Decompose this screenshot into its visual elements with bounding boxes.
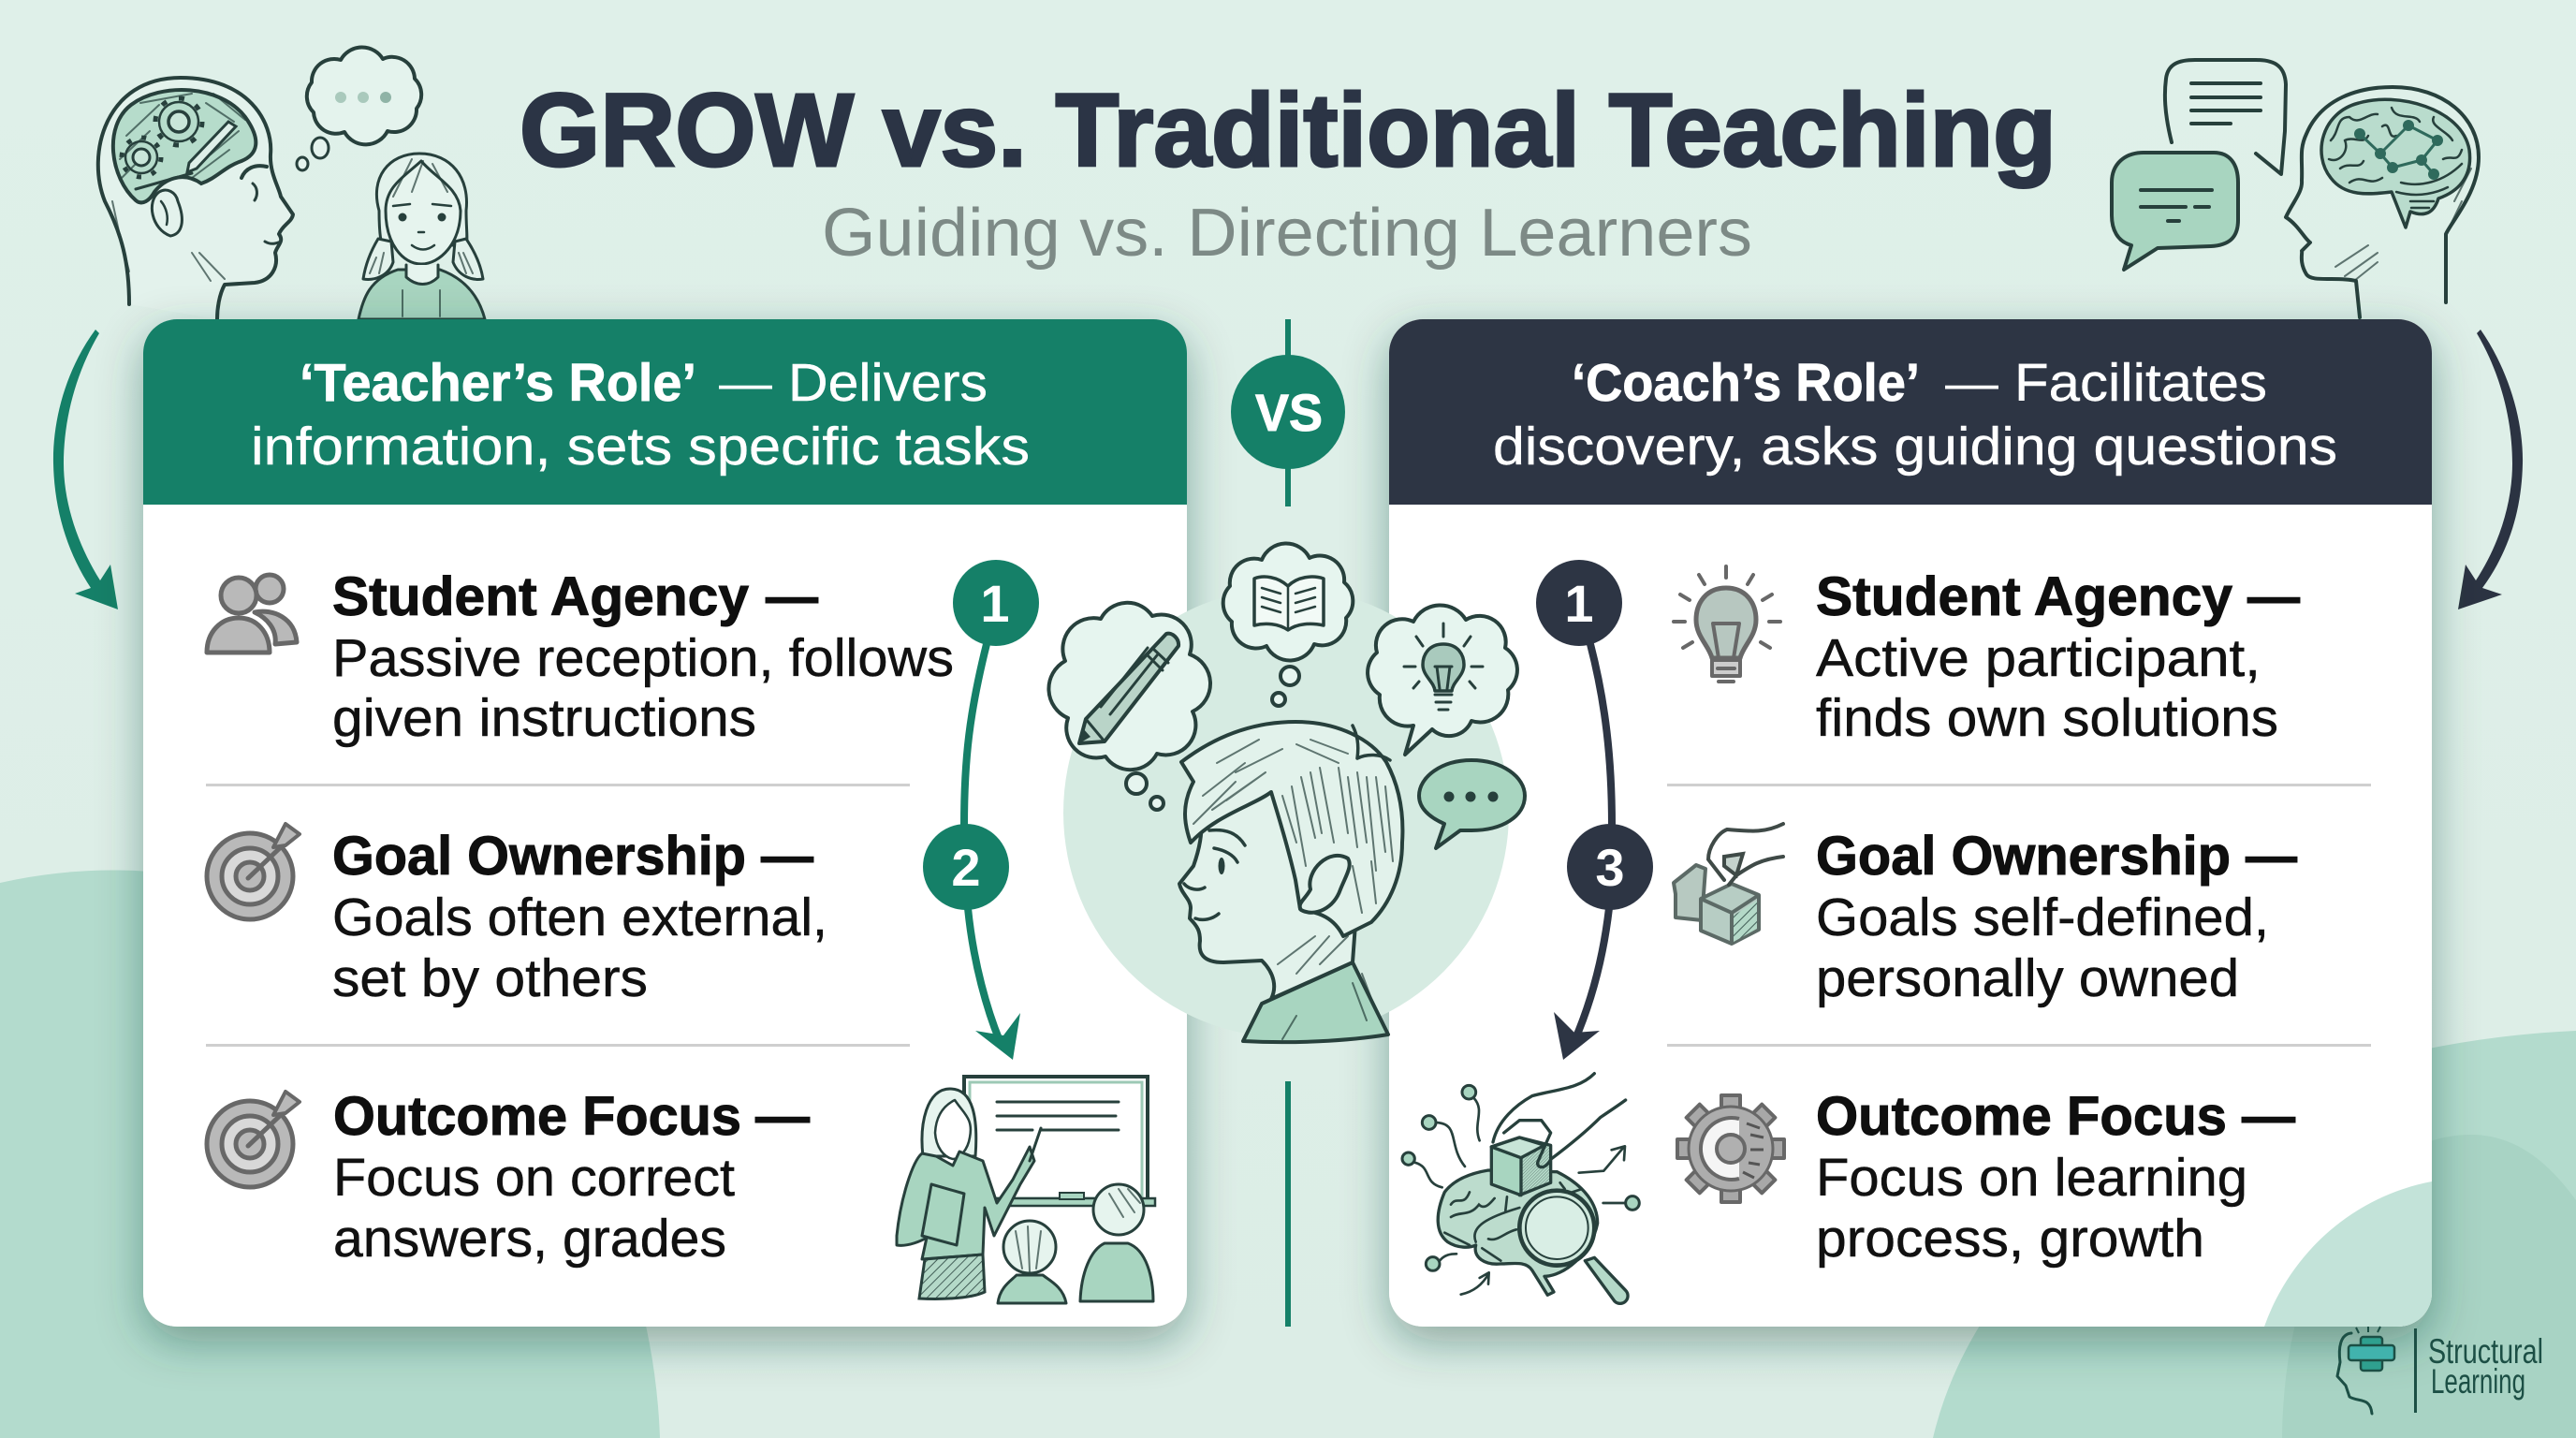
panel: coach's role: [1389, 319, 2432, 1327]
boy: face: [1179, 777, 1357, 999]
boy: ear: [1300, 856, 1350, 913]
row text: teacher goal ownership: Goal Ownership: [332, 826, 746, 887]
row text: teacher outcome focus: Outcome Focus: [333, 1086, 741, 1147]
row text: teacher goal ownership: [332, 826, 827, 1008]
icon: hand placing block: [1674, 824, 1783, 944]
VS badge: VS: [1255, 383, 1323, 442]
illustration: adult head with gears and pencil: [98, 78, 293, 319]
row text: teacher student agency: [332, 566, 954, 748]
thought: pencil: [1048, 603, 1210, 810]
row text: coach student agency: Student Agency: [1816, 566, 2232, 627]
row text: coach outcome focus: [1816, 1086, 2295, 1269]
step badge 3 coach: 3: [1595, 838, 1625, 897]
heading text: teacher: Delivers: [788, 353, 988, 413]
heading text: teacher: ‘Teacher’s Role’: [300, 353, 696, 413]
row text: teacher student agency: Passive reception, follows: [332, 628, 954, 688]
centre line bottom: [1285, 1081, 1291, 1327]
arrow: coach process: [1554, 644, 1612, 1060]
thought: light bulb: [1368, 605, 1517, 755]
background blob: bottom right darker: [2282, 1135, 2576, 1438]
heading text: coach: ‘Coach’s Role’: [1572, 353, 1920, 413]
row text: coach goal ownership: Goal Ownership: [1816, 826, 2231, 887]
step badge 1 coach: 1: [1564, 574, 1594, 633]
illustration: boy with thoughts: [1048, 544, 1525, 1042]
centre circle: [1063, 588, 1509, 1037]
row text: coach outcome focus: Outcome Focus: [1816, 1086, 2227, 1147]
arrow: teacher process: [964, 644, 1020, 1060]
illustration: adult head with brain: [2286, 87, 2479, 317]
row text: coach student agency: [1816, 566, 2300, 748]
background blob: bottom right: [1933, 1031, 2576, 1438]
row text: teacher goal ownership: set by others: [332, 948, 648, 1008]
row text: teacher outcome focus: Focus on correct: [333, 1148, 735, 1208]
row text: coach goal ownership: [1816, 826, 2297, 1008]
VS badge: [1231, 355, 1345, 469]
title: GROW vs. Traditional Teaching: [520, 73, 2056, 188]
row text: coach student agency: —: [2247, 566, 2300, 627]
row text: teacher student agency: given instructions: [332, 688, 756, 748]
row text: coach outcome focus: Focus on learning: [1816, 1148, 2247, 1208]
boy: hair: [1181, 722, 1402, 936]
arrow: left outer: [53, 330, 118, 609]
row text: coach goal ownership: personally owned: [1816, 948, 2239, 1008]
step badge 3 coach: [1567, 824, 1653, 910]
logo divider: [2414, 1328, 2417, 1413]
boy: hair hatching: [1193, 740, 1393, 1039]
thought bubble with dots: [297, 48, 421, 170]
panel header: coach: [1389, 319, 2432, 505]
logo mark: [2337, 1327, 2394, 1414]
row text: teacher outcome focus: [333, 1086, 810, 1269]
logo text: Learning: [2431, 1362, 2525, 1401]
row text: coach outcome focus: process, growth: [1816, 1209, 2204, 1269]
centre line top: [1285, 319, 1291, 506]
row text: teacher student agency: Student Agency: [332, 566, 749, 627]
boy: shirt and neck: [1243, 962, 1388, 1042]
row text: coach outcome focus: —: [2242, 1086, 2295, 1147]
step badge 1 teacher: 1: [980, 574, 1010, 633]
illustration: hand, brain and magnifier: [1402, 1074, 1639, 1303]
row text: teacher goal ownership: Goals often external,: [332, 888, 827, 947]
thought: book: [1223, 544, 1353, 706]
step badge 1 coach: [1536, 560, 1622, 646]
step badge 2 teacher: [923, 824, 1009, 910]
step badge 1 teacher: [953, 560, 1039, 646]
boy: facial features: [1184, 726, 1390, 919]
row text: coach goal ownership: Goals self-defined,: [1816, 888, 2269, 947]
decorative blob over coach panel: [2264, 1181, 2432, 1327]
icon: target 1: [207, 824, 300, 919]
illustration: girl: [359, 154, 485, 319]
illustration: teacher at whiteboard: [897, 1077, 1155, 1303]
arrow: right outer: [2458, 330, 2523, 609]
speech bubble with dots: [1419, 760, 1525, 848]
row text: teacher goal ownership: —: [761, 826, 813, 887]
row text: coach student agency: finds own solutions: [1816, 688, 2278, 748]
heading text: teacher: [251, 353, 1030, 477]
row text: teacher student agency: —: [766, 566, 818, 627]
panel: teacher's role: [143, 319, 1187, 1327]
step badge 2 teacher: 2: [951, 838, 981, 897]
row dividers: [206, 784, 2371, 1047]
panel header: teacher: [143, 319, 1187, 505]
row text: coach goal ownership: —: [2246, 826, 2297, 887]
icon: light bulb: [1674, 566, 1780, 682]
logo: Structural Learning: [2337, 1327, 2543, 1414]
illustration: speech bubble filled: [2112, 153, 2238, 270]
heading text: coach: Facilitates: [2014, 353, 2267, 413]
logo text: [2428, 1332, 2543, 1401]
heading text: coach: —: [1945, 353, 1998, 413]
row text: teacher outcome focus: answers, grades: [333, 1209, 726, 1269]
icon: people: [207, 575, 297, 653]
logo text: Structural: [2428, 1332, 2543, 1371]
icon: target 2: [207, 1092, 300, 1187]
subtitle: Guiding vs. Directing Learners: [822, 196, 1752, 271]
row text: coach student agency: Active participant,: [1816, 628, 2261, 688]
background blob: bottom left: [0, 871, 660, 1438]
icon: gear: [1677, 1095, 1784, 1202]
illustration: speech bubble outlined: [2165, 60, 2286, 174]
heading text: coach: [1493, 353, 2337, 477]
heading text: coach: discovery, asks guiding questions: [1493, 417, 2337, 477]
heading text: teacher: information, sets specific tasks: [251, 417, 1030, 477]
heading text: teacher: —: [719, 353, 772, 413]
row text: teacher outcome focus: —: [755, 1086, 810, 1147]
